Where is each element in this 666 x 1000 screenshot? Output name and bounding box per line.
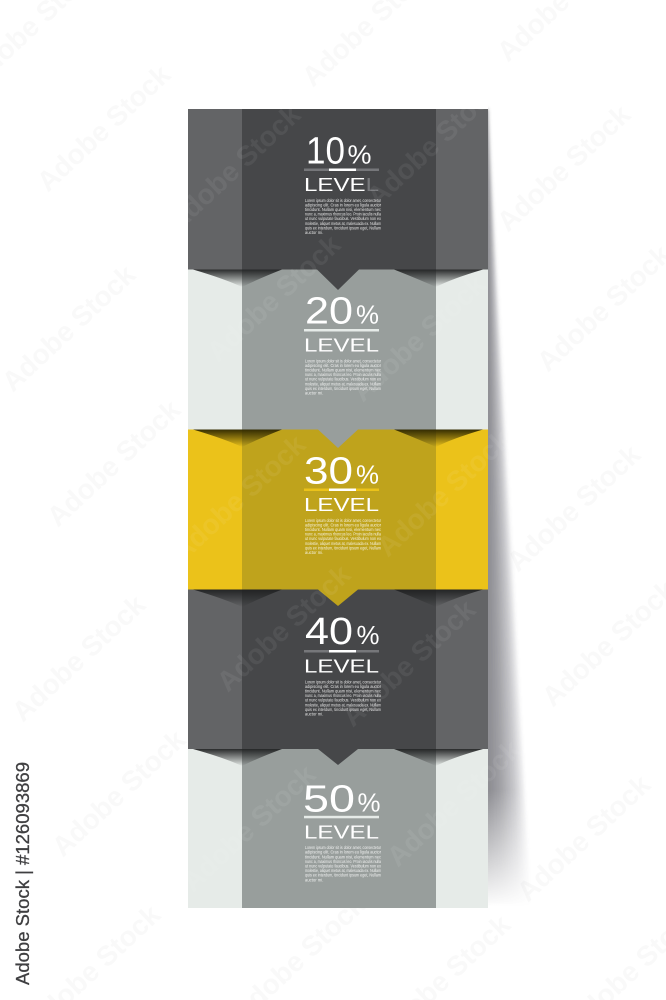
watermark over panels: Adobe Stock (176, 758, 322, 897)
panel: 40% level background (188, 590, 488, 749)
watermark on background: Adobe Stock (31, 58, 177, 197)
arrow: 40% to 50% (318, 749, 358, 765)
text block: 40% level: ut nunc vulputate faucibus. Vestibulum non ex (305, 698, 382, 703)
text block: 50% level: nunc a, maximus rhoncus leo. Proin iaculis nulla (305, 859, 382, 864)
text block: 30% level: molestie, aliquet metus at, malesuada ex. Nullam (305, 541, 381, 546)
watermark over panels (161, 73, 527, 897)
text block: 10% level: 10 (306, 130, 345, 172)
fold shadow: 30% row (193, 430, 483, 447)
watermark over panels: Adobe Stock (211, 558, 357, 697)
panel: 30% level background (188, 430, 488, 590)
watermark on background: Adobe Stock (41, 393, 187, 532)
text block: 50% level: 50 (303, 778, 355, 820)
text block: 10% level: LEVE L (304, 174, 379, 195)
text block: 20% level: Lorem ipsum dolor sit is dolor amet, consectetur (305, 358, 382, 363)
watermark on background: Adobe Stock (501, 438, 647, 577)
text block: 20% level: % (356, 300, 379, 330)
text block: 30% level: tincidunt. Nullam quam nisi, elementum nec (305, 527, 381, 532)
watermark on background: Adobe Stock (491, 98, 637, 237)
text block: 20% level: molestie, aliquet metus at, malesuada ex. Nullam (305, 381, 381, 386)
fold shadow: 50% row (193, 749, 483, 766)
fold shadow: 20% row (193, 270, 483, 287)
panel: 50% level background (188, 749, 488, 908)
arrow: 30% to 40% (318, 590, 358, 606)
watermark over panels: Adobe Stock (161, 98, 307, 237)
watermark over panels: Adobe Stock (371, 423, 517, 562)
text block: 50% level: Lorem ipsum dolor sit is dolor amet, consectetur (305, 845, 382, 850)
text block: 10% level: nunc a, maximus rhoncus leo. Proin iaculis nulla (305, 212, 382, 217)
text block: 20% level: quis ex interdum, tincidunt ipsum eget, Nullam (305, 386, 381, 391)
text block: 20% level: adipiscing elit. Cras in lorem eu ligula auctor (305, 363, 382, 368)
text block: 30% level: LEVEL (304, 494, 379, 515)
arrow: 10% to 20% (317, 270, 359, 290)
text block: 50% level: % (358, 787, 380, 817)
watermark on background: Adobe Stock (6, 588, 152, 727)
text block: 50% level: ut nunc vulputate faucibus. Vestibulum non ex (305, 863, 382, 868)
panel: 10% level background (188, 109, 488, 270)
arrow: 20% to 30% (318, 430, 358, 448)
right side drop shadow (488, 108, 526, 900)
watermark over panels: Adobe Stock (346, 268, 492, 407)
text block: 40% level: % (356, 620, 380, 650)
text block: 40% level: molestie, aliquet metus at, malesuada ex. Nullam (305, 702, 381, 707)
watermark over panels: Adobe Stock (336, 593, 482, 732)
text block: 10% level: molestie, aliquet metus at, malesuada ex. Nullam (305, 221, 381, 226)
text block: 40% level: nunc a, maximus rhoncus leo. Proin iaculis nulla (305, 693, 382, 698)
text block: 30% level (304, 450, 382, 555)
text block: 20% level: ut nunc vulputate faucibus. Vestibulum non ex (305, 377, 382, 382)
watermark on background: Adobe Stock (511, 768, 657, 907)
text block: 10% level: ut nunc vulputate faucibus. Vestibulum non ex (305, 216, 382, 221)
text block: 20% level: 20 (305, 290, 353, 332)
text block: 30% level: % (356, 460, 379, 490)
text block: 40% level: tincidunt. Nullam quam nisi, elementum nec (305, 688, 381, 694)
watermark on background: Adobe Stock (0, 258, 142, 397)
watermark on background: Adobe Stock (46, 723, 192, 862)
text block: 30% level: auctor mi. (305, 550, 323, 555)
text block: 50% level: molestie, aliquet metus at, malesuada ex. Nullam (305, 868, 381, 873)
text block: 20% level: tincidunt. Nullam quam nisi, elementum nec (305, 368, 381, 372)
watermark over panels: Adobe Stock (361, 73, 507, 212)
text block: 20% level (304, 290, 382, 396)
text block: 10% level: tincidunt. Nullam quam nisi, elementum nec (305, 207, 381, 212)
text block: 40% level: LEVEL (304, 656, 379, 676)
text block: 50% level: auctor mi. (305, 877, 323, 882)
watermark over panels: Adobe Stock (381, 733, 527, 872)
text block: 30% level: nunc a, maximus rhoncus leo. Proin iaculis nulla (305, 532, 382, 537)
text block: 50% level: LEVEL (304, 821, 379, 842)
text block: 30% level: ut nunc vulputate faucibus. Vestibulum non ex (305, 536, 382, 541)
text block: 10% level: auctor mi. (305, 230, 323, 235)
fold shadow: 40% row (193, 590, 483, 607)
stock id label: Adobe Stock | #126093869 (13, 762, 33, 985)
text block: 10% level: Lorem ipsum dolor sit is dolor amet, consectetur (305, 198, 382, 203)
text block: 30% level: 30 (304, 450, 353, 492)
text block: 30% level: adipiscing elit. Cras in lorem eu ligula auctor (305, 522, 382, 527)
text block: 20% level: LEVEL (304, 334, 379, 356)
watermark over panels: Adobe Stock (166, 428, 312, 567)
watermark over panels: Adobe Stock (201, 228, 347, 367)
text block: 50% level: quis ex interdum, tincidunt ipsum eget, Nullam (305, 873, 381, 878)
text block: 50% level: tincidunt. Nullam quam nisi, elementum nec (305, 854, 381, 859)
text block: 50% level: adipiscing elit. Cras in lorem eu ligula auctor (305, 850, 382, 855)
text block: 20% level: nunc a, maximus rhoncus leo. Proin iaculis nulla (305, 372, 382, 377)
text block: 40% level: auctor mi. (305, 712, 323, 716)
text block: 40% level: adipiscing elit. Cras in lorem eu ligula auctor (305, 684, 382, 689)
text block: 40% level: Lorem ipsum dolor sit is dolor amet, consectetur (305, 679, 382, 684)
text block: 30% level: Lorem ipsum dolor sit is dolor amet, consectetur (305, 518, 382, 523)
text block: 40% level: 40 (305, 611, 353, 653)
text block: 10% level (304, 130, 382, 235)
text block: 40% level: quis ex interdum, tincidunt ipsum eget, Nullam (305, 707, 381, 712)
text block: 10% level: % (348, 140, 372, 170)
text block: 20% level: auctor mi. (305, 390, 323, 396)
text block: 50% level (303, 778, 382, 882)
text block: 10% level: adipiscing elit. Cras in lorem eu ligula auctor (305, 202, 382, 207)
panel: 20% level background (188, 270, 488, 430)
text block: 10% level: quis ex interdum, tincidunt ipsum eget, Nullam (305, 225, 381, 230)
text block: 30% level: quis ex interdum, tincidunt ipsum eget, Nullam (305, 545, 381, 550)
text block: 40% level (304, 611, 382, 716)
